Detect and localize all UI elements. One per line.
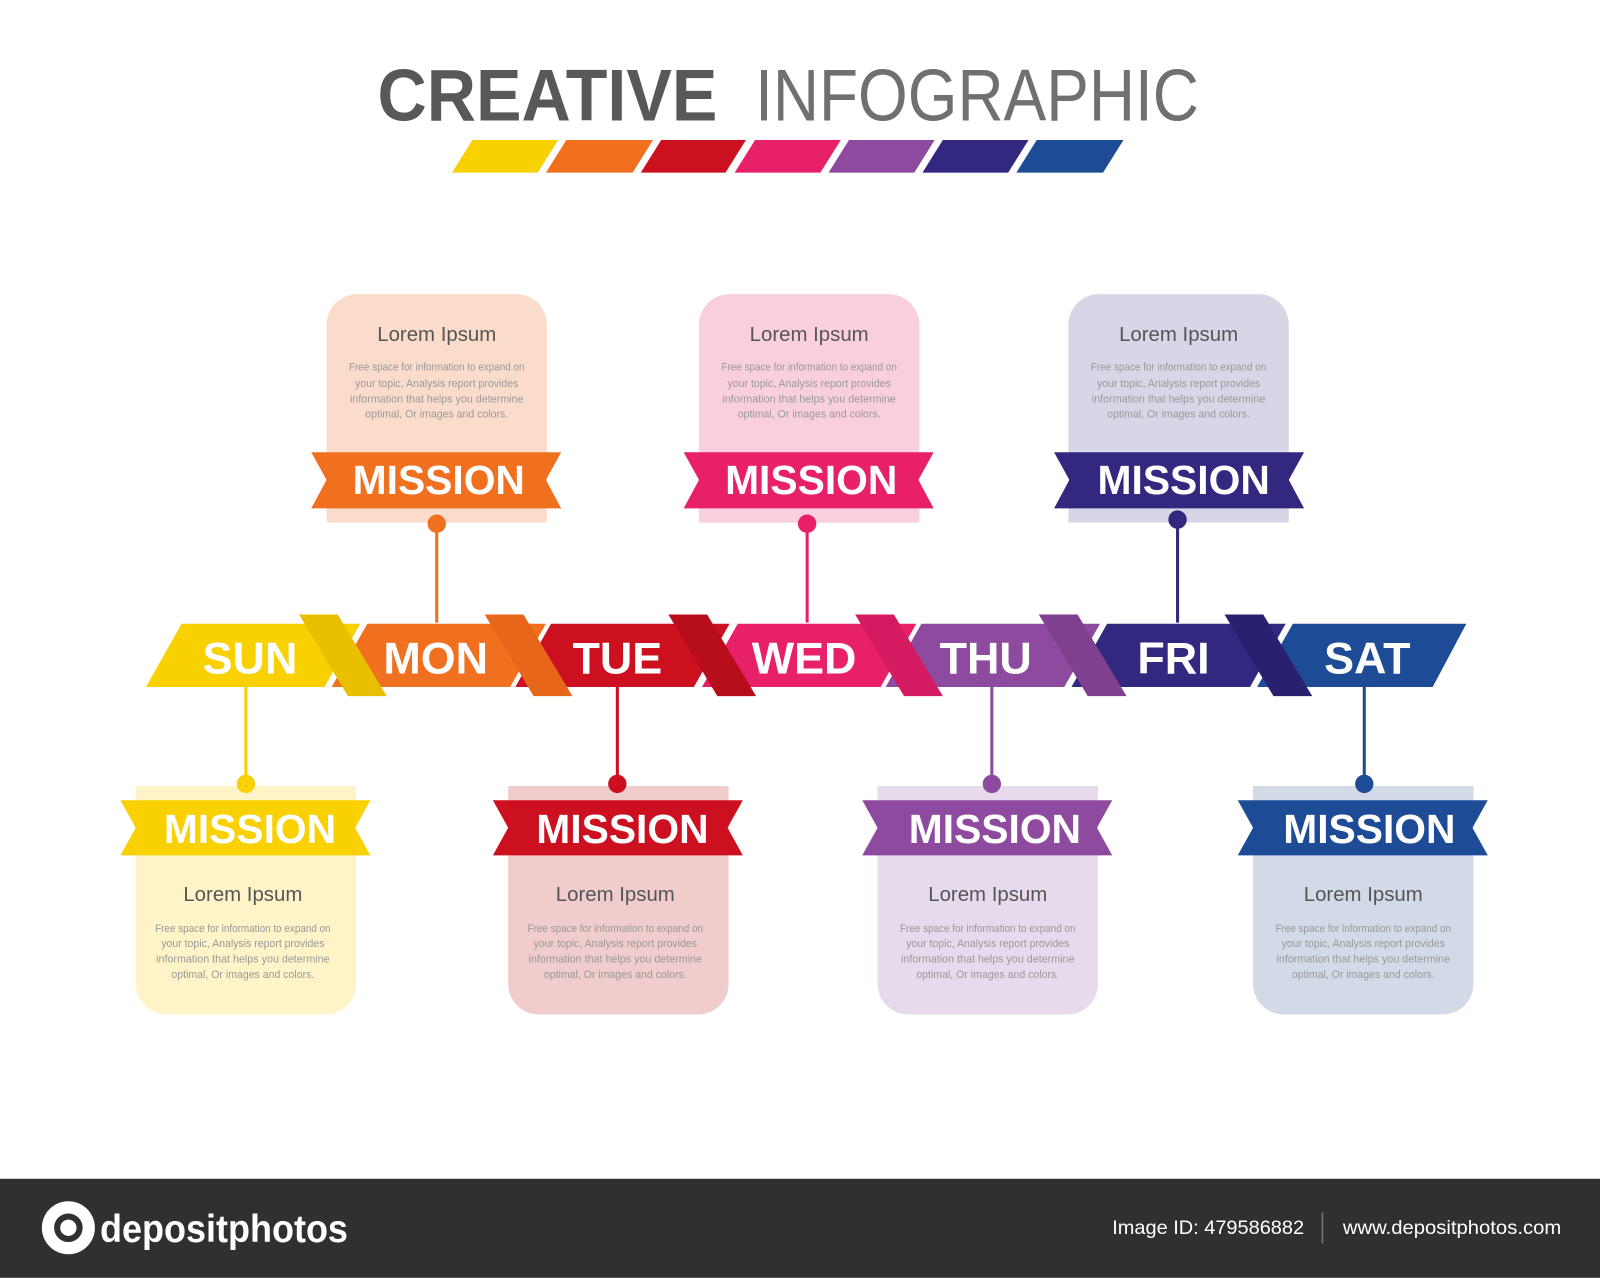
panel: THU: optimal, Or images and colors. [916,969,1059,981]
footer [0,1179,1600,1278]
panel: SAT: your topic, Analysis report provides [1282,938,1445,950]
footer: depositphotos [100,1208,348,1251]
panel: WED: Lorem Ipsum [750,324,869,346]
panel: MON: optimal, Or images and colors. [365,409,508,421]
footer: Image ID: 479586882 [1112,1217,1304,1239]
panel: TUE: optimal, Or images and colors. [544,969,687,981]
title: INFOGRAPHIC [755,54,1199,137]
connectors [237,510,1373,793]
panel: SUN: your topic, Analysis report provides [161,938,325,950]
panel: FRI [1054,294,1304,523]
panel: MON [311,294,561,523]
panel: TUE: your topic, Analysis report provides [534,938,697,950]
panel: SAT: optimal, Or images and colors. [1292,969,1435,981]
panel: SUN: information that helps you determine [156,953,330,965]
panel: TUE: MISSION [536,806,709,852]
panel: SAT [1238,786,1488,1015]
panel: SAT: MISSION [1283,806,1456,852]
panel: THU: your topic, Analysis report provides [906,938,1070,950]
footer: www.depositphotos.com [1342,1217,1561,1239]
panel: THU: information that helps you determine [901,953,1074,965]
title: CREATIVE [378,54,717,137]
panel: THU: Free space for information to expand on [900,923,1076,935]
day timeline bar: SAT [1324,633,1411,684]
panel: FRI: MISSION [1098,457,1270,503]
panel: MON: information that helps you determine [350,393,523,405]
panel: TUE [493,786,743,1015]
panel: SUN: Free space for information to expand on [155,923,331,935]
day timeline bar: SUN [203,633,297,684]
day timeline bar: WED [752,633,856,684]
panel: SUN: MISSION [164,806,336,852]
panel: SUN: optimal, Or images and colors. [171,969,314,981]
panel: FRI: Free space for information to expand on [1091,362,1266,374]
day timeline bar: MON [383,633,488,684]
panel: TUE: Lorem Ipsum [556,884,675,906]
panel: WED: information that helps you determine [722,393,896,405]
panel: SAT: information that helps you determine [1277,953,1450,965]
panel: SAT: Free space for information to expand on [1276,923,1451,935]
day timeline bar: FRI [1137,633,1210,684]
panel: FRI: information that helps you determine [1092,393,1265,405]
panel: SUN: Lorem Ipsum [183,884,302,906]
panel: WED: your topic, Analysis report provides [728,378,891,390]
panel: THU: Lorem Ipsum [928,884,1047,906]
panel: MON: your topic, Analysis report provides [355,378,519,390]
panel: FRI: Lorem Ipsum [1119,324,1238,346]
panel: WED [684,294,934,523]
day timeline bar: TUE [572,633,662,684]
panel: WED: MISSION [725,457,897,503]
panel: MON: MISSION [353,457,525,503]
panel: MON: Free space for information to expand on [349,362,524,374]
day timeline bar: THU [940,633,1032,684]
panel: TUE: information that helps you determine [529,953,702,965]
panel: SUN [120,786,370,1015]
panel: THU: MISSION [909,806,1081,852]
panel: FRI: optimal, Or images and colors. [1107,409,1250,421]
panel: TUE: Free space for information to expand on [528,923,703,935]
panel: WED: Free space for information to expand on [721,362,897,374]
panel: THU [862,786,1112,1015]
color stripes [452,140,1123,173]
panel: MON: Lorem Ipsum [377,324,496,346]
panel: FRI: your topic, Analysis report provides [1097,378,1261,390]
day timeline bar [146,615,1466,696]
panel: WED: optimal, Or images and colors. [738,409,881,421]
title [378,54,1199,137]
panel: SAT: Lorem Ipsum [1304,884,1423,906]
